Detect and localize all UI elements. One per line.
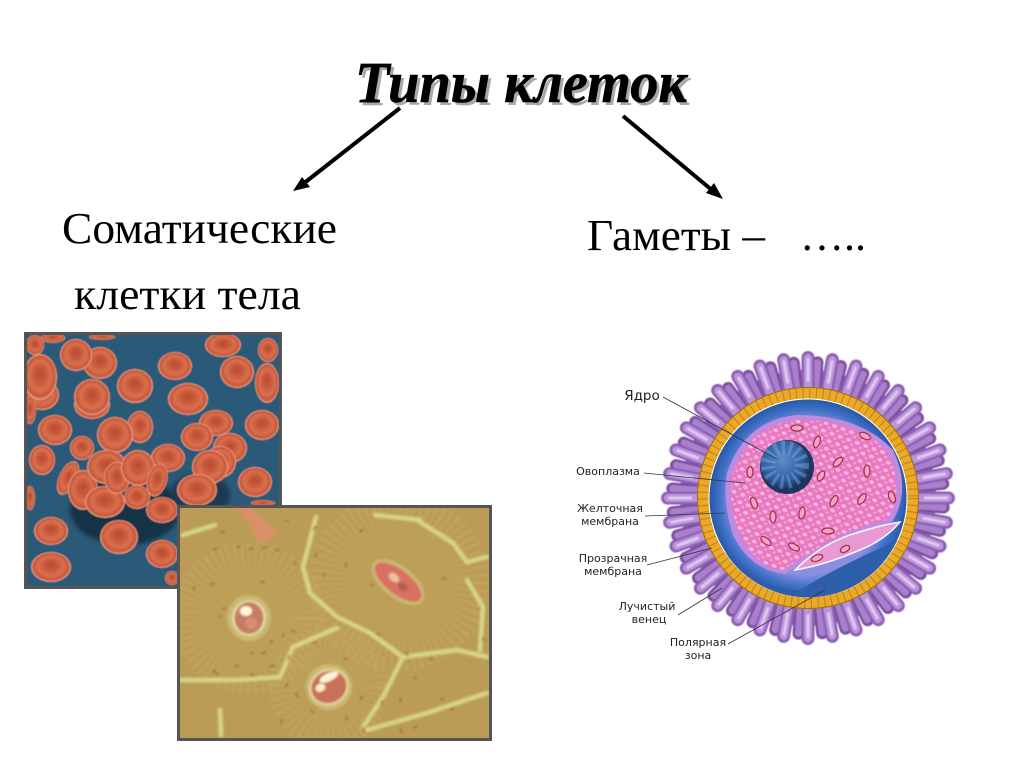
cell nucleus 2 (374, 561, 422, 603)
labels: Ядро (624, 388, 660, 404)
perivitelline space (710, 400, 906, 596)
heading: somatic cells (62, 204, 337, 319)
labels: Овоплазма (576, 465, 640, 478)
arrow: left to somatic cells (293, 108, 400, 191)
labels: мембрана (581, 515, 639, 528)
heading: somatic cells: Соматические (62, 204, 337, 253)
labels: венец (632, 613, 666, 626)
diagram: egg cell (576, 351, 955, 662)
title: Типы клеток (358, 53, 692, 118)
organelles (747, 425, 897, 563)
arrow: right to gametes (623, 116, 723, 199)
cell nucleus 1 (232, 600, 266, 636)
photo: red blood cells (23, 333, 281, 588)
title: Типы клеток (355, 50, 689, 115)
nucleus (760, 440, 814, 494)
pink wedge (235, 508, 276, 543)
heading: gametes: Гаметы – (587, 211, 766, 260)
labels: Желточная (577, 502, 643, 515)
leader lines (644, 397, 825, 644)
cell striations (280, 609, 384, 680)
cell walls (180, 515, 487, 735)
photo: tissue cells (175, 503, 495, 743)
corona radiata (661, 351, 955, 645)
labels: мембрана (584, 565, 642, 578)
heading: somatic cells: клетки тела (74, 270, 301, 319)
tissue ticks (193, 521, 483, 733)
vitelline membrane (725, 415, 902, 574)
heading: gametes (587, 211, 866, 260)
labels: Полярная (670, 636, 726, 649)
heading: gametes: ….. (800, 211, 866, 260)
nucleus halos (227, 550, 432, 710)
labels (576, 388, 726, 662)
cell nucleus 3 (308, 668, 350, 706)
labels: Прозрачная (579, 552, 647, 565)
polar body crescent (795, 522, 900, 570)
labels: зона (685, 649, 711, 662)
zona pellucida ring (698, 388, 918, 608)
labels: Лучистый (619, 600, 675, 613)
ooplasm (731, 420, 896, 570)
